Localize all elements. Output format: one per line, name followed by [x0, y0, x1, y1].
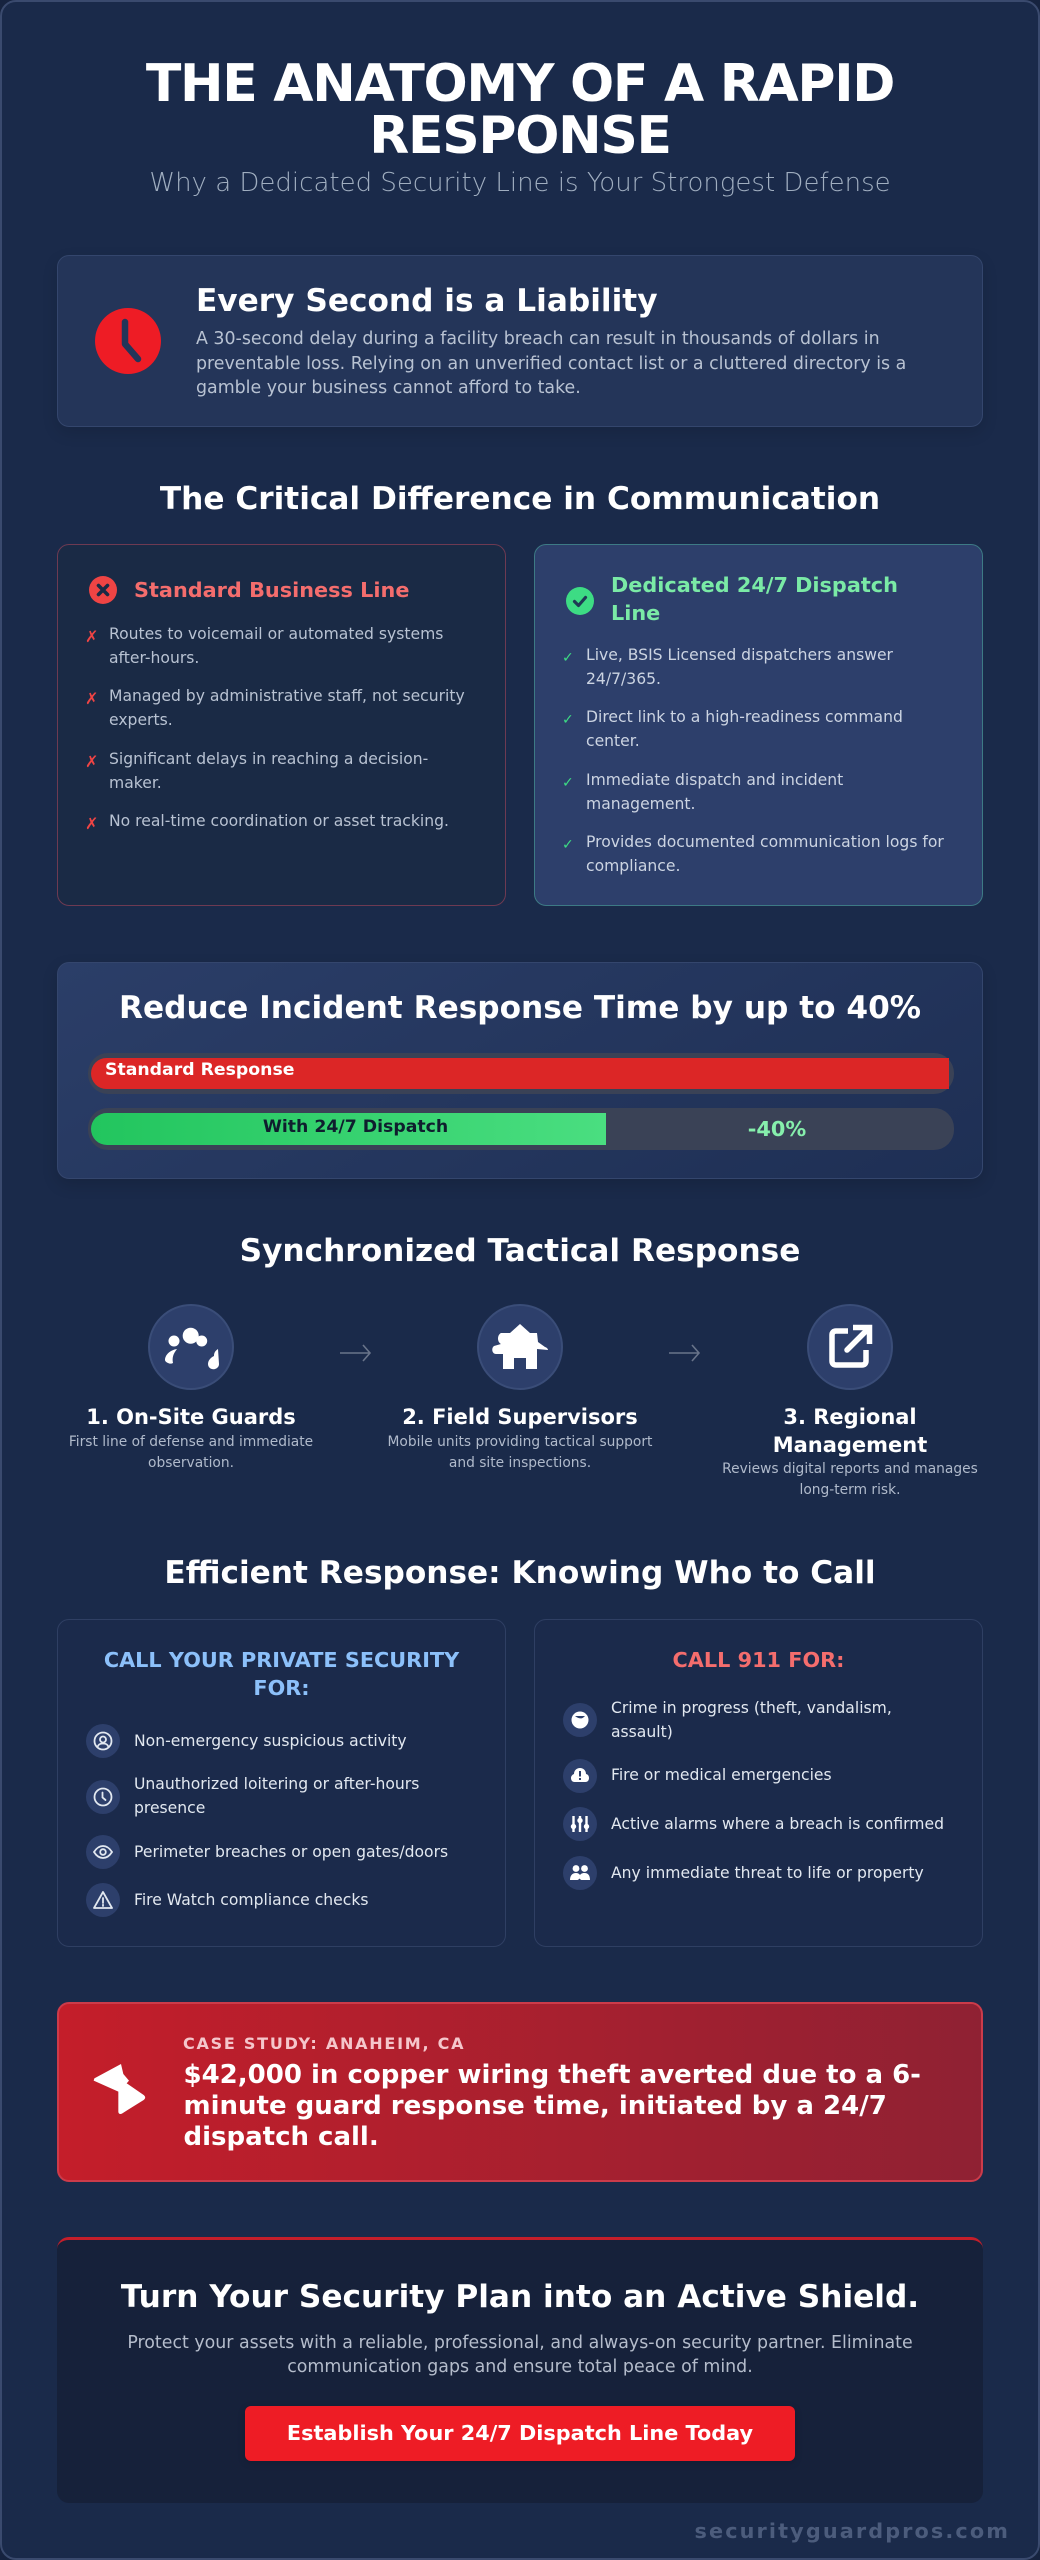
- bar: with 24/7 dispatch: [88, 1108, 954, 1150]
- list of drawbacks: [85, 625, 465, 833]
- icon: x circle: [89, 576, 117, 604]
- title: [146, 54, 894, 166]
- bar: standard response: [88, 1053, 954, 1094]
- list of benefits: compliance.: [586, 857, 680, 875]
- list of benefits: Direct link to a high-readiness command: [586, 708, 903, 726]
- list of drawbacks: ✗: [85, 627, 98, 646]
- list of 911 items: Any immediate threat to life or property: [611, 1864, 924, 1882]
- step description: First line of defense and immediate: [69, 1434, 313, 1450]
- list of drawbacks: Managed by administrative staff, not security: [109, 687, 465, 705]
- list of benefits: ✓: [562, 837, 574, 853]
- cta body text: [127, 2333, 913, 2377]
- cta button: Establish Your 24/7 Dispatch Line Today: [287, 2421, 753, 2445]
- list of 911 items: Crime in progress (theft, vandalism,: [611, 1699, 892, 1717]
- heading: synchronized response: Synchronized Tactical Response: [240, 1233, 800, 1269]
- icon: external link: [807, 1304, 893, 1390]
- list of private security items: Perimeter breaches or open gates/doors: [134, 1843, 448, 1861]
- list of private security items: presence: [134, 1799, 205, 1817]
- panel body text: A 30-second delay during a facility breach can result in thousands of dollars in: [196, 329, 880, 349]
- list of benefits: Live, BSIS Licensed dispatchers answer: [586, 646, 893, 664]
- list of benefits: 24/7/365.: [586, 670, 661, 688]
- list of drawbacks: ✗: [85, 752, 98, 771]
- icon: guards: [148, 1304, 234, 1390]
- list of drawbacks: after-hours.: [109, 649, 199, 667]
- card heading: Standard Business Line: [134, 578, 409, 602]
- card heading: [611, 573, 898, 625]
- step description: [69, 1434, 313, 1471]
- card heading: CALL 911 FOR:: [672, 1648, 844, 1672]
- icon: crime: [563, 1703, 597, 1737]
- chart heading: Reduce Incident Response Time by up to 40%: [119, 990, 921, 1026]
- icon: check circle: [566, 587, 594, 615]
- icon: warning: [86, 1883, 120, 1917]
- panel: standard business line: [57, 544, 506, 906]
- case study headline: dispatch call.: [184, 2122, 379, 2152]
- list of benefits: ✓: [562, 712, 574, 728]
- cta body text: communication gaps and ensure total peace of mind.: [287, 2357, 753, 2377]
- step 1: on-site guards: [69, 1304, 313, 1471]
- arrow: [669, 1344, 700, 1362]
- panel body text: preventable loss. Relying on an unverified contact list or a cluttered directory is a: [196, 354, 906, 374]
- list of benefits: ✓: [562, 650, 574, 666]
- card heading: Line: [611, 601, 660, 625]
- panel: dedicated dispatch line: [534, 544, 983, 906]
- list of benefits: Immediate dispatch and incident: [586, 771, 843, 789]
- step description: long-term risk.: [800, 1482, 900, 1498]
- list of drawbacks: Routes to voicemail or automated systems: [109, 625, 443, 643]
- panel: call 911: [534, 1619, 983, 1947]
- icon: person: [86, 1724, 120, 1758]
- icon: house: [477, 1304, 563, 1390]
- step description: [722, 1461, 978, 1498]
- case study headline: [184, 2060, 921, 2152]
- subtitle: Why a Dedicated Security Line is Your Strongest Defense: [149, 168, 891, 198]
- list of 911 items: [563, 1699, 944, 1890]
- list of benefits: ✓: [562, 775, 574, 791]
- icon: clock: [86, 1780, 120, 1814]
- icon: fire or medical: [563, 1759, 597, 1793]
- list of drawbacks: No real-time coordination or asset tracking.: [109, 812, 449, 830]
- step title: Management: [773, 1433, 927, 1457]
- list of private security items: Non-emergency suspicious activity: [134, 1732, 407, 1750]
- footer: website: securityguardpros.com: [695, 2519, 1010, 2543]
- cta heading: Turn Your Security Plan into an Active Shield.: [121, 2279, 919, 2315]
- icon: clock: [95, 308, 161, 374]
- list of drawbacks: experts.: [109, 711, 173, 729]
- step 3: regional management: [722, 1304, 978, 1498]
- title: RESPONSE: [369, 106, 671, 166]
- case study headline: $42,000 in copper wiring theft averted due to a 6-: [184, 2060, 921, 2090]
- arrow: [340, 1344, 371, 1362]
- step title: [773, 1405, 927, 1457]
- panel: call to action: [57, 2237, 983, 2503]
- title: THE ANATOMY OF A RAPID: [146, 54, 894, 114]
- heading: critical difference: The Critical Difference in Communication: [160, 481, 880, 517]
- list of drawbacks: Significant delays in reaching a decision-: [109, 750, 428, 768]
- panel body text: gamble your business cannot afford to take.: [196, 378, 581, 398]
- bar: with 24/7 dispatch: With 24/7 Dispatch: [263, 1117, 448, 1137]
- bar: standard response: Standard Response: [105, 1060, 294, 1080]
- list of drawbacks: maker.: [109, 774, 162, 792]
- icon: bolt: [94, 2064, 146, 2114]
- value label: -40%: [748, 1117, 806, 1141]
- step title: 1. On-Site Guards: [86, 1405, 296, 1429]
- list of benefits: [562, 646, 944, 875]
- list of 911 items: Active alarms where a breach is confirmed: [611, 1815, 944, 1833]
- card heading: [104, 1648, 460, 1700]
- callout: case study: [57, 2002, 983, 2182]
- card heading: Dedicated 24/7 Dispatch: [611, 573, 898, 597]
- panel heading: Every Second is a Liability: [196, 283, 658, 319]
- panel: call private security: [57, 1619, 506, 1947]
- icon: alarm sliders: [563, 1807, 597, 1841]
- step description: Mobile units providing tactical support: [388, 1434, 652, 1450]
- list of benefits: center.: [586, 732, 640, 750]
- list of private security items: Unauthorized loitering or after-hours: [134, 1775, 419, 1793]
- list of 911 items: Fire or medical emergencies: [611, 1766, 832, 1784]
- card heading: FOR:: [253, 1676, 310, 1700]
- icon: people: [563, 1856, 597, 1890]
- list of benefits: management.: [586, 795, 695, 813]
- list of private security items: Fire Watch compliance checks: [134, 1891, 368, 1909]
- card heading: CALL YOUR PRIVATE SECURITY: [104, 1648, 459, 1672]
- panel body text: [196, 329, 906, 398]
- step description: Reviews digital reports and manages: [722, 1461, 978, 1477]
- step 2: field supervisors: [388, 1304, 652, 1471]
- case study headline: minute guard response time, initiated by a 24/7: [184, 2091, 887, 2121]
- panel: every second is a liability: [57, 255, 983, 427]
- cta body text: Protect your assets with a reliable, professional, and always-on security partner. Eliminate: [127, 2333, 913, 2353]
- case study label: CASE STUDY: ANAHEIM, CA: [183, 2034, 465, 2053]
- panel: response time chart: [57, 962, 983, 1179]
- list of drawbacks: ✗: [85, 689, 98, 708]
- cta button: [245, 2406, 795, 2461]
- list of 911 items: assault): [611, 1723, 673, 1741]
- step description: observation.: [148, 1455, 234, 1471]
- step description: and site inspections.: [449, 1455, 591, 1471]
- icon: eye: [86, 1835, 120, 1869]
- heading: who to call: Efficient Response: Knowing Who to Call: [164, 1555, 876, 1591]
- step description: [388, 1434, 652, 1471]
- list of private security items: [86, 1724, 448, 1917]
- step title: 2. Field Supervisors: [402, 1405, 638, 1429]
- list of drawbacks: ✗: [85, 814, 98, 833]
- list of benefits: Provides documented communication logs for: [586, 833, 944, 851]
- step title: 3. Regional: [783, 1405, 917, 1429]
